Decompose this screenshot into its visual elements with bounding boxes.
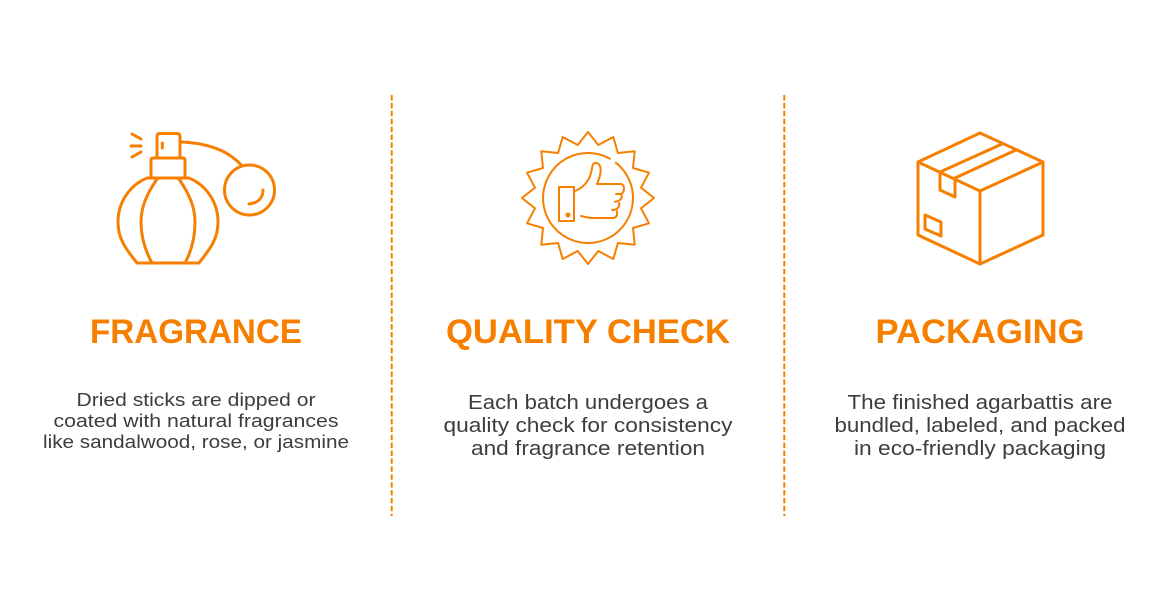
heading: packaging: PACKAGING bbox=[876, 313, 1084, 351]
heading: quality check: QUALITY CHECK bbox=[446, 313, 730, 351]
text: quality check description: quality check for consistency bbox=[444, 415, 732, 437]
panel: packaging bbox=[834, 133, 1126, 460]
icon: cardboard box bbox=[918, 133, 1043, 264]
text: quality check description bbox=[444, 392, 732, 460]
text: packaging description: bundled, labeled, and packed bbox=[834, 415, 1126, 437]
text: quality check description: and fragrance retention bbox=[471, 438, 705, 460]
text: fragrance description: coated with natural fragrances bbox=[54, 410, 338, 431]
icon: perfume bottle bbox=[118, 134, 274, 263]
icon: thumbs up badge bbox=[522, 132, 654, 264]
panel: fragrance bbox=[43, 134, 349, 452]
text: packaging description: The finished agarbattis are bbox=[848, 392, 1112, 414]
text: quality check description: Each batch undergoes a bbox=[468, 392, 709, 414]
text: packaging description bbox=[834, 392, 1126, 460]
heading: fragrance: FRAGRANCE bbox=[90, 313, 302, 351]
text: fragrance description: like sandalwood, rose, or jasmine bbox=[43, 431, 349, 452]
panel: quality check bbox=[444, 132, 732, 460]
text: fragrance description bbox=[43, 389, 349, 452]
text: fragrance description: Dried sticks are dipped or bbox=[76, 389, 316, 410]
text: packaging description: in eco-friendly packaging bbox=[854, 438, 1106, 460]
